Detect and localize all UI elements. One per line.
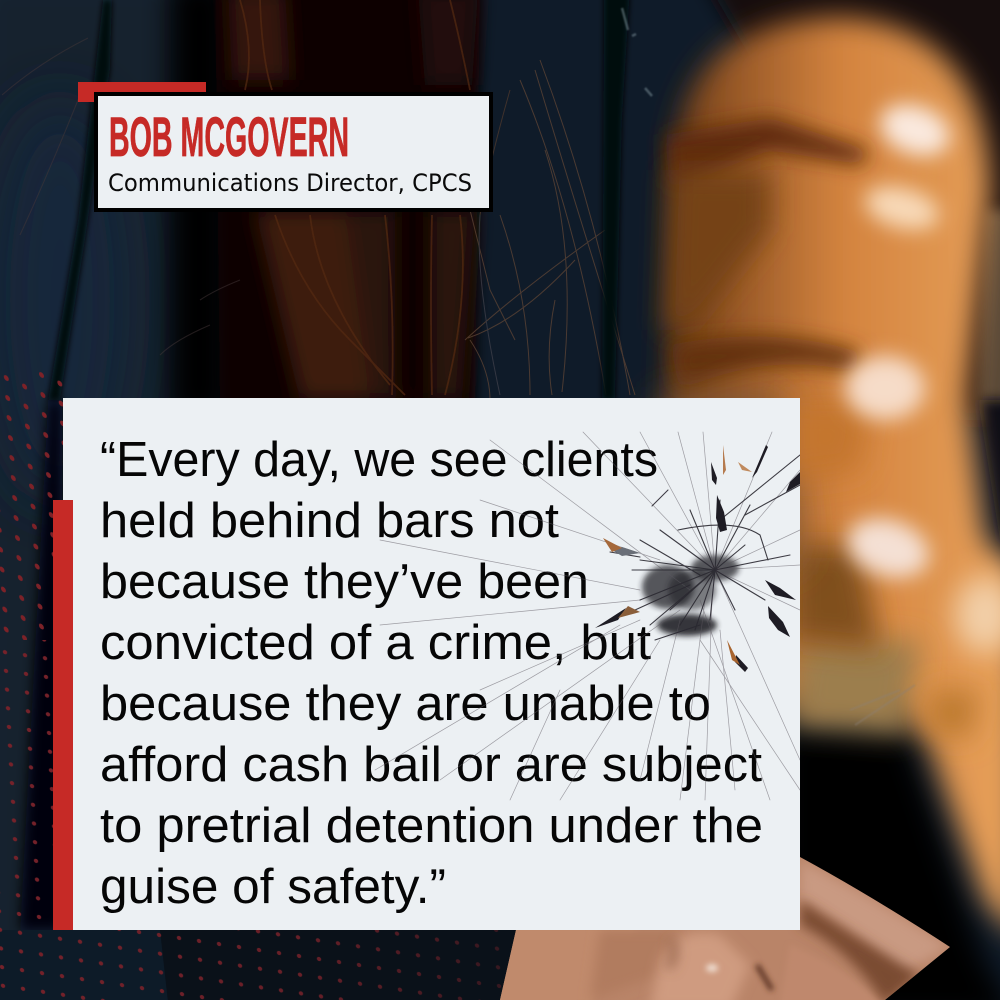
quote text: afford cash bail or are subject (100, 738, 762, 792)
zipper glints (622, 8, 652, 96)
black shadow below gavel (780, 730, 1000, 1000)
quote text: guise of safety.” (100, 860, 446, 914)
panel: quote card (53, 398, 800, 930)
quote text: convicted of a crime, but (100, 616, 651, 670)
role: Communications Director, CPCS (108, 169, 472, 197)
glass shards (716, 495, 727, 532)
quote text: because they’ve been (100, 555, 589, 609)
dot pattern: left upper column (0, 372, 63, 640)
gavel head (660, 17, 1000, 940)
quote text (100, 433, 763, 914)
quote text: held behind bars not (100, 494, 559, 548)
name card (96, 94, 491, 210)
jacket left (0, 0, 180, 1000)
quote text: “Every day, we see clients (100, 433, 658, 487)
name: BOB MCGOVERN (109, 105, 349, 168)
red accent tab (78, 82, 206, 102)
hair (215, 0, 480, 420)
dot pattern: lower left and bottom strip (0, 640, 512, 1000)
accent bar (53, 500, 73, 930)
hair strands (2, 0, 635, 400)
shattered glass crack (375, 432, 800, 800)
quote text: because they are unable to (100, 677, 711, 731)
quote text: to pretrial detention under the (100, 799, 763, 853)
crack core (642, 565, 694, 609)
top-right dark background (700, 0, 1000, 420)
hand (490, 850, 960, 1000)
